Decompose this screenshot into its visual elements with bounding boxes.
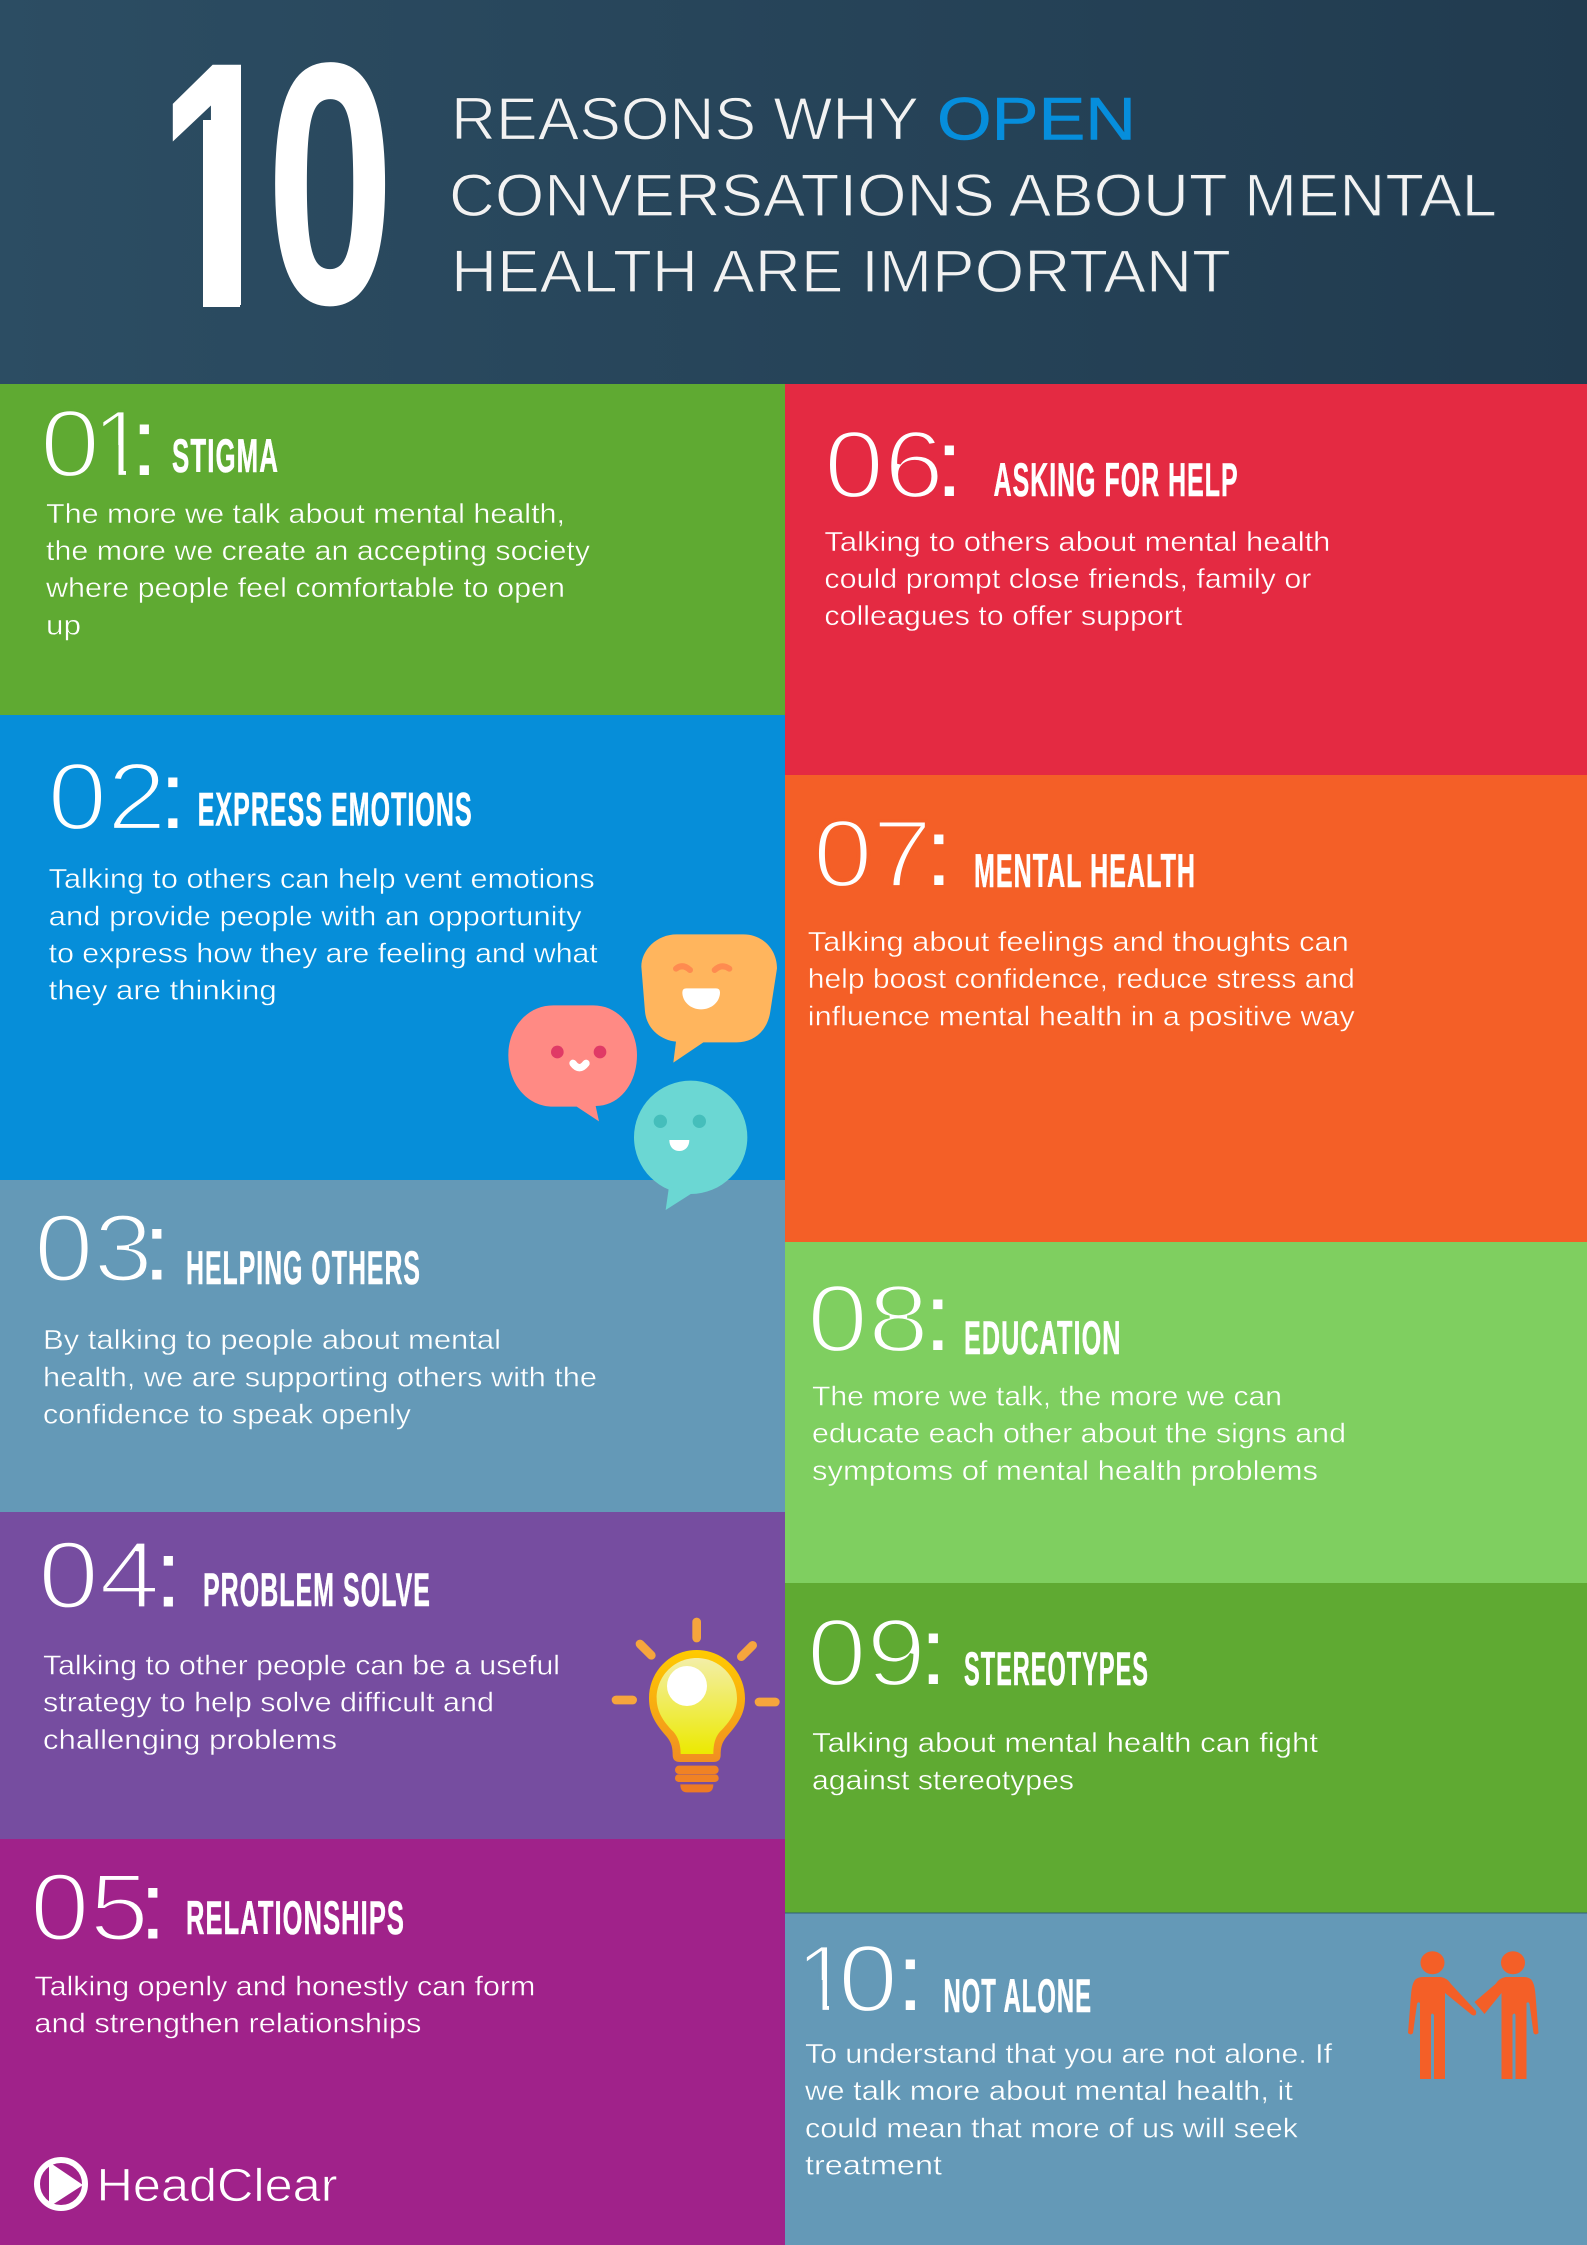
body text 04: strategy to help solve difficult and (43, 1687, 494, 1718)
body text 10: To understand that you are not alone. If (805, 2038, 1332, 2069)
body text 07: Talking about feelings and thoughts can (808, 926, 1349, 957)
logo: HeadClear (37, 2159, 338, 2211)
title (449, 86, 1497, 305)
body text 07 (808, 926, 1355, 1031)
body text 10: treatment (805, 2150, 942, 2181)
body text 05 (34, 1970, 535, 2039)
heading stereotypes: STEREOTYPES (964, 1642, 1149, 1695)
number 03: 03 (34, 1195, 153, 1302)
body text 02: and provide people with an opportunity (49, 900, 582, 931)
panel 08: education (785, 1242, 1587, 1583)
heading helping others: HELPING OTHERS (186, 1241, 421, 1294)
body text 02: they are thinking (49, 975, 277, 1006)
heading asking for help: ASKING FOR HELP (994, 453, 1239, 506)
body text 07: influence mental health in a positive way (808, 1000, 1355, 1031)
body text 09: against stereotypes (812, 1764, 1074, 1795)
body text 08: symptoms of mental health problems (812, 1455, 1318, 1486)
body text 07: help boost confidence, reduce stress and (808, 963, 1355, 994)
body text 04 (43, 1650, 560, 1755)
body text 02: to express how they are feeling and what (49, 938, 598, 968)
body text 01: up (46, 610, 81, 640)
body text 09: Talking about mental health can fight (812, 1727, 1318, 1758)
panel 05: relationships (0, 1839, 785, 2245)
body text 10 (804, 2038, 1332, 2181)
body text 05: and strengthen relationships (34, 2008, 421, 2039)
panel 06: asking for help (785, 384, 1587, 775)
body text 01 (45, 498, 590, 640)
body text 05: Talking openly and honestly can form (34, 1970, 535, 2001)
body text 03: By talking to people about mental (43, 1324, 501, 1355)
body text 04: challenging problems (43, 1724, 337, 1755)
big number 10 (172, 62, 386, 307)
number 03: : (144, 1194, 170, 1300)
title: CONVERSATIONS ABOUT MENTAL (449, 162, 1497, 229)
panel 02: express emotions (0, 715, 785, 1180)
body text 10: we talk more about mental health, it (804, 2075, 1293, 2106)
icon: speech bubbles (508, 934, 777, 1210)
body text 02 (49, 863, 598, 1006)
body text 03 (43, 1324, 597, 1430)
number 01: 1 (92, 390, 146, 498)
number 10 (806, 1946, 915, 2011)
body text 09 (812, 1727, 1318, 1795)
title: REASONS WHY (451, 86, 919, 152)
icon: red smiling bubble (508, 1005, 637, 1121)
number 08: : (924, 1264, 951, 1371)
panel 03: helping others (0, 1180, 785, 1512)
body text 03: confidence to speak openly (43, 1399, 411, 1430)
big number 10: 0 (266, 0, 395, 377)
body text 04: Talking to other people can be a useful (43, 1650, 560, 1680)
panel 01: stigma (0, 384, 785, 715)
title: HEALTH ARE IMPORTANT (451, 238, 1231, 305)
number 01: 0 (40, 390, 100, 498)
body text 01: the more we create an accepting society (46, 535, 590, 566)
panel 04: problem solve (0, 1512, 785, 1839)
number 02: 02 (48, 744, 166, 850)
body text 02: Talking to others can help vent emotions (49, 863, 595, 894)
number 10: 0 (838, 1926, 898, 2032)
panel 09: stereotypes (785, 1583, 1587, 1913)
number 04: : (155, 1521, 182, 1628)
body text 01: where people feel comfortable to open (45, 572, 565, 603)
number 06: 06 (824, 412, 944, 518)
heading relationships: RELATIONSHIPS (186, 1891, 405, 1944)
number 10: 1 (796, 1926, 849, 2032)
body text 08: The more we talk, the more we can (812, 1380, 1282, 1411)
panel 10: not alone (785, 1912, 1587, 2245)
heading express emotions: EXPRESS EMOTIONS (198, 782, 473, 836)
header panel (0, 0, 1587, 384)
heading problem solve: PROBLEM SOLVE (203, 1563, 431, 1616)
number 01 (46, 411, 149, 476)
body text 08: educate each other about the signs and (812, 1418, 1346, 1449)
icon: play button (37, 2160, 85, 2208)
body text 06: could prompt close friends, family or (824, 563, 1311, 594)
icon: two people holding hands (1408, 1951, 1538, 2079)
body text 01: The more we talk about mental health, (46, 498, 565, 529)
icon: teal smiling bubble (634, 1081, 747, 1210)
logo wordmark: HeadClear (96, 2159, 338, 2211)
icon: light bulb (616, 1622, 775, 1792)
number 09: 09 (807, 1600, 926, 1706)
number 06: : (936, 410, 963, 517)
heading stigma: STIGMA (172, 429, 279, 482)
heading mental health: MENTAL HEALTH (974, 844, 1196, 897)
number 09: : (920, 1598, 947, 1705)
number 07: : (926, 799, 952, 906)
body text 03: health, we are supporting others with the (43, 1362, 597, 1392)
body text 06: Talking to others about mental health (824, 526, 1330, 557)
heading not alone: NOT ALONE (944, 1969, 1092, 2022)
icon: orange laughing bubble (641, 934, 777, 1063)
heading education: EDUCATION (964, 1311, 1122, 1364)
big number 10: 1 (157, 0, 286, 379)
number 10: : (897, 1924, 924, 2031)
number 05: 05 (30, 1854, 149, 1961)
number 07: 07 (813, 800, 932, 908)
body text 06 (824, 526, 1330, 631)
number 08: 08 (807, 1266, 929, 1372)
panel 07: mental health (785, 775, 1587, 1242)
body text 10: could mean that more of us will seek (805, 2112, 1299, 2143)
number 02: : (160, 742, 186, 849)
number 04: 04 (38, 1522, 160, 1629)
number 05: : (140, 1852, 166, 1960)
number 01: : (131, 389, 158, 496)
title: OPEN (937, 86, 1136, 152)
body text 08 (812, 1380, 1346, 1486)
body text 06: colleagues to offer support (824, 600, 1183, 631)
